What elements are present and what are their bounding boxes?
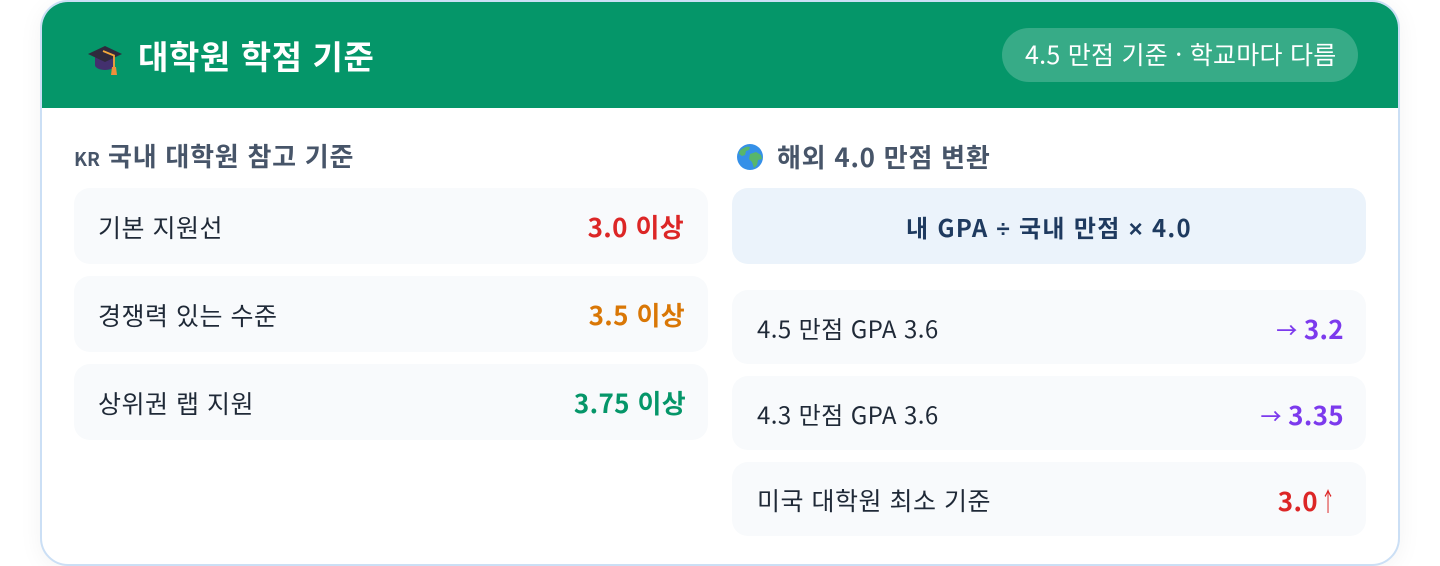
panel: overseas conversion (732, 138, 1366, 519)
title: 대학원 학점 기준 (138, 31, 374, 79)
row: 4.3 scale: → 3.35 (1261, 396, 1344, 433)
badge: 4.5 만점 기준 · 학교마다 다름 (1025, 36, 1336, 72)
header band (42, 2, 1398, 108)
row: 4.3 scale (732, 376, 1366, 450)
row: 4.5 scale: → 3.2 (1276, 310, 1344, 347)
panel: domestic criteria (74, 137, 686, 421)
heading: domestic: KR 국내 대학원 참고 기준 (74, 137, 354, 174)
heading: overseas: 해외 4.0 만점 변환 (777, 138, 991, 175)
row: 4.5 scale: 4.5 만점 GPA 3.6 (757, 310, 939, 345)
row: competitive: 3.5 이상 (589, 296, 685, 333)
row: basic: 3.0 이상 (588, 208, 684, 245)
row: 4.3 scale: 4.3 만점 GPA 3.6 (757, 396, 939, 431)
row: basic: 기본 지원선 (98, 209, 223, 245)
row: top labs: 상위권 랩 지원 (98, 385, 254, 421)
row: basic (74, 188, 708, 264)
row: US minimum: 3.0 (1278, 482, 1318, 519)
row: top labs: 3.75 이상 (574, 384, 686, 421)
row: US minimum: 미국 대학원 최소 기준 (757, 482, 991, 518)
row: US minimum: ↑ (1321, 482, 1335, 519)
icon: graduation cap (88, 46, 122, 75)
formula box: 내 GPA ÷ 국내 만점 × 4.0 (906, 209, 1192, 244)
row: 4.5 scale (732, 290, 1366, 364)
row: competitive: 경쟁력 있는 수준 (98, 297, 278, 333)
formula box (732, 188, 1366, 264)
row: US minimum (732, 462, 1366, 536)
row: competitive (74, 276, 708, 352)
row: top labs (74, 364, 708, 440)
badge (1002, 28, 1358, 82)
icon: globe (737, 144, 763, 170)
